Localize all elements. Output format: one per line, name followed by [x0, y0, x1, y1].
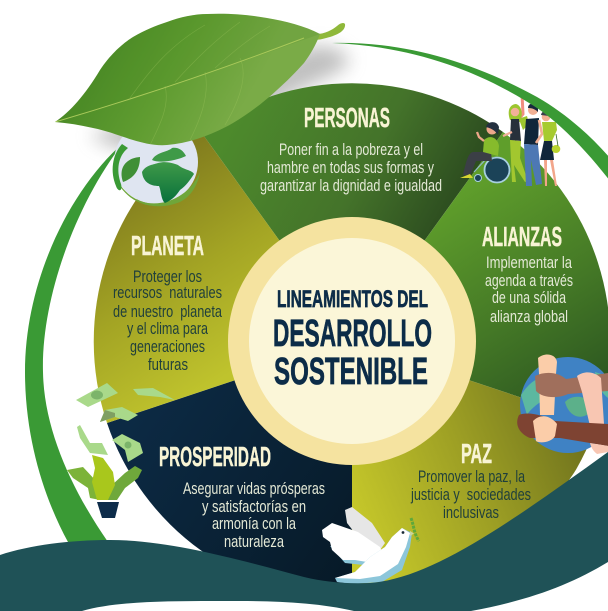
segment: personas [201, 83, 503, 341]
icon: dove [322, 507, 419, 584]
medium brown arm [535, 373, 608, 397]
man [524, 104, 542, 186]
text: prosperidad: Asegurar vidas prósperas [183, 479, 325, 498]
text: prosperidad: naturaleza [224, 532, 285, 551]
heading: center title: SOSTENIBLE [274, 351, 428, 393]
pink forearm [577, 372, 604, 426]
text: planeta: PLANETA [131, 230, 204, 261]
text: prosperidad: PROSPERIDAD [159, 441, 271, 472]
text: planeta [113, 230, 223, 374]
plant [67, 467, 100, 500]
note [133, 388, 175, 400]
wave: dark teal footer [0, 452, 608, 611]
note [76, 383, 118, 407]
segment: alianzas [352, 132, 608, 423]
text: prosperidad: y satisfactorías en [202, 497, 306, 516]
text: personas [260, 102, 442, 195]
icon: globe [113, 120, 200, 206]
segment: paz [352, 341, 597, 599]
woman with raised arm [503, 94, 529, 182]
pink lower arm [590, 443, 608, 457]
heading: center title [273, 286, 432, 393]
sleeve [569, 452, 608, 480]
light fist [533, 416, 557, 442]
text: paz: inclusivas [443, 503, 499, 522]
pot [97, 502, 119, 518]
text: planeta: Proteger los [133, 267, 202, 286]
segment: planeta [94, 132, 352, 423]
arc: green top right swoosh [332, 43, 608, 181]
text: alianzas [482, 221, 573, 326]
text: paz [410, 438, 531, 522]
text: paz: justicia y sociedades [410, 485, 531, 504]
text: planeta: futuras [148, 355, 188, 374]
leaf [55, 0, 345, 145]
text: personas: Poner fin a la pobreza y el [279, 140, 423, 159]
heading: center title: DESARROLLO [273, 313, 432, 355]
note [112, 434, 143, 462]
wheelchair user [460, 122, 510, 182]
text: paz: Promover la paz, la [418, 467, 525, 486]
text: planeta: recursos naturales [113, 283, 222, 302]
text: planeta: de nuestro planeta [113, 302, 223, 321]
text: personas: hambre en todas sus formas y [267, 158, 434, 177]
text: alianzas: Implementar la [486, 253, 573, 272]
center circle [228, 217, 476, 465]
heading: center title: LINEAMIENTOS DEL [277, 286, 428, 313]
text: alianzas: de una sólida [492, 288, 566, 307]
icon: hands around globe [517, 355, 608, 480]
text: planeta: generaciones [130, 337, 205, 356]
text: alianzas: agenda a través [485, 271, 573, 290]
icon: people [460, 94, 560, 186]
segment: prosperidad [107, 341, 352, 599]
dark brown arm [517, 414, 608, 446]
note [77, 425, 108, 455]
arc: green left swoosh [25, 143, 123, 542]
icon: plant with money [67, 383, 175, 518]
text: alianzas: alianza global [490, 307, 568, 326]
earth [520, 357, 608, 453]
panel: pie wheel [94, 83, 608, 599]
text: paz: PAZ [461, 438, 492, 469]
light forearm [538, 355, 557, 415]
leaf shadow [90, 46, 350, 151]
text: personas: garantizar la dignidad e igualdad [260, 176, 442, 195]
text: prosperidad: armonía con la [212, 514, 296, 533]
text: prosperidad [159, 441, 325, 551]
text: planeta: y el clima para [127, 319, 208, 338]
text: personas: PERSONAS [304, 102, 390, 133]
note [100, 407, 138, 422]
woman with bag [540, 111, 560, 186]
